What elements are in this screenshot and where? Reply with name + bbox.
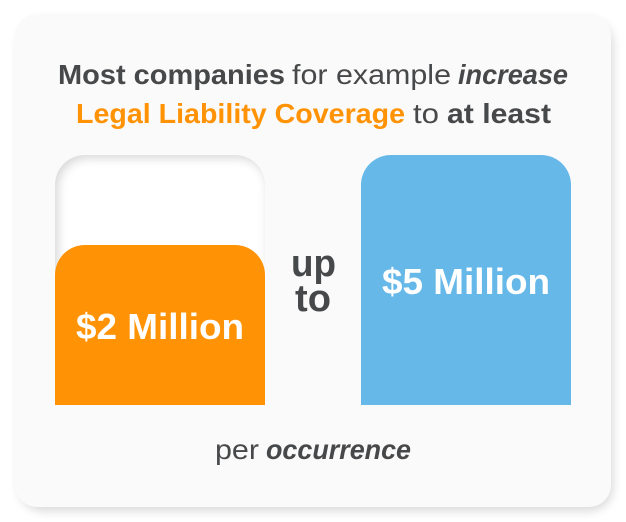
left bar: orange $2 Million — [55, 245, 265, 405]
heading — [58, 59, 568, 129]
footer text: per occurrence: occurrence — [266, 434, 411, 465]
heading line 2: at least — [447, 98, 551, 129]
footer text: per occurrence: per — [215, 434, 259, 465]
connector text: up to — [291, 243, 336, 320]
heading line 2: Legal Liability Coverage — [76, 98, 405, 129]
heading line 1: increase — [458, 59, 568, 90]
heading line 2: to — [413, 98, 439, 129]
left bar: empty container — [55, 155, 265, 405]
heading line 2 — [76, 98, 551, 129]
heading line 1: for example — [292, 59, 451, 90]
connector text: up to: to — [295, 278, 331, 320]
right bar: blue $5 Million — [361, 155, 571, 405]
left bar: orange $2 Million: $2 Million — [76, 306, 244, 347]
connector text: up to: up — [291, 243, 336, 285]
right bar: blue $5 Million: $5 Million — [382, 261, 550, 302]
heading line 1: Most companies — [58, 59, 285, 90]
heading line 1 — [58, 59, 568, 90]
